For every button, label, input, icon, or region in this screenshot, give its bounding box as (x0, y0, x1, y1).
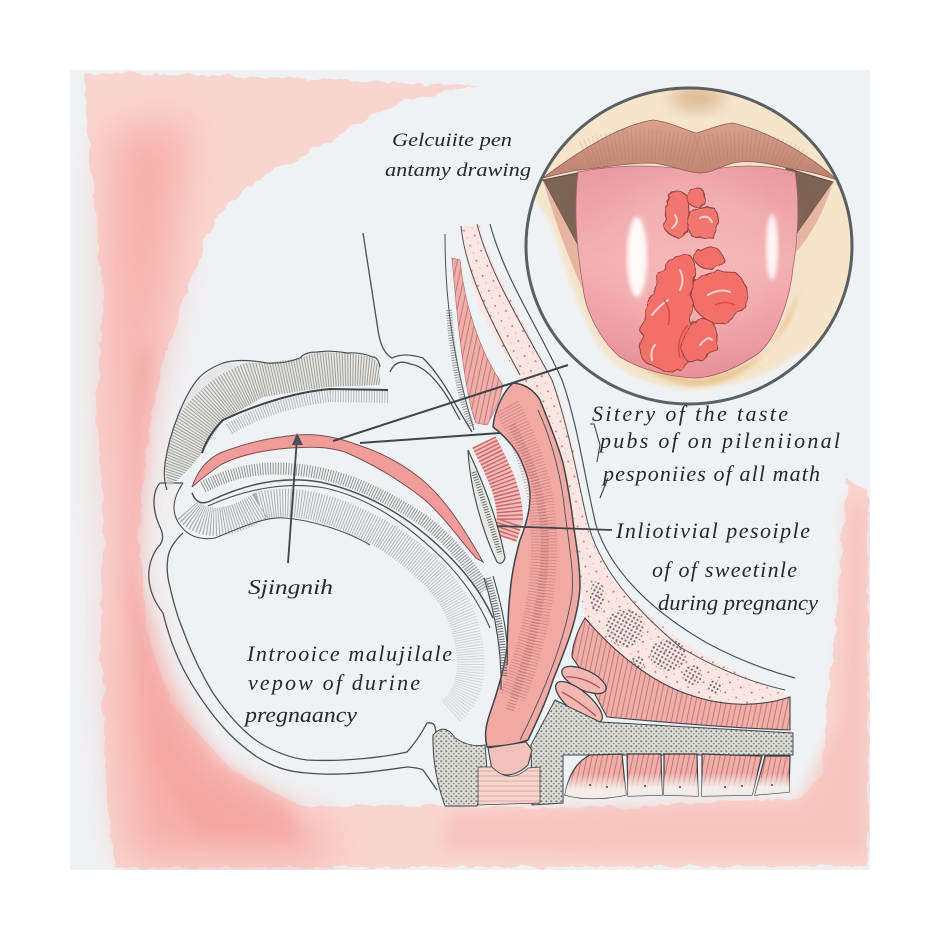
skin around the mouth (520, 80, 860, 390)
wart highlights (651, 215, 730, 360)
watercolor wash: pink border (84, 72, 868, 868)
lower lip edge right (796, 182, 833, 252)
circle outline (526, 88, 852, 404)
lower pink hatched tissue (572, 618, 790, 730)
oral cavity outline curves (149, 233, 472, 790)
label: pregnancy note left: Introoice malujilale (246, 641, 452, 666)
label: pregnancy note right: of of sweetinle (652, 557, 797, 582)
label: Sjingnih: Sjingnih (248, 575, 333, 599)
soft palate pink strip (452, 258, 503, 425)
label: pregnancy note right: during pregnancy (658, 590, 818, 615)
label: taste buds (592, 401, 840, 486)
label: pregnancy note left: pregnaancy (243, 702, 357, 727)
label: pregnancy note left (243, 641, 452, 727)
label: pregnancy note left: vepow of durine (248, 670, 420, 695)
illustration: watercolor anatomy drawing (70, 70, 870, 870)
pointer: Sjingnih label (288, 433, 303, 563)
upper lip (543, 120, 837, 180)
large wart (639, 247, 748, 373)
palate: upper hatched band (164, 351, 388, 490)
bracket lines near right labels (590, 424, 608, 498)
caption: drawing title (385, 130, 531, 181)
caption: drawing title: antamy drawing (385, 160, 531, 181)
magnified circle: tongue close-up (520, 80, 860, 404)
tan halo under tongue (581, 286, 798, 388)
small folded organ (550, 661, 610, 729)
label: taste buds: Sitery of the taste (592, 401, 788, 426)
dark cell clusters (590, 581, 722, 694)
tongue inner glow (626, 166, 752, 334)
label: taste buds: pesponiies of all math (601, 461, 820, 486)
bottom of pharynx cartilage (433, 729, 540, 806)
caption: drawing title: Gelcuiite pen (392, 130, 512, 151)
pointer: epiglottis label (497, 526, 612, 530)
label: pregnancy note right (615, 518, 818, 615)
pointer: pharynx to tongue (360, 433, 500, 443)
lip texture (585, 144, 800, 165)
label: pregnancy note right: Inliotivial pesoiple (615, 518, 810, 543)
paper sheet (70, 70, 870, 870)
stippled spine band (531, 700, 793, 805)
tongue (576, 166, 798, 378)
dark mouth corner left (542, 172, 578, 245)
epiglottis striped sliver (468, 450, 505, 563)
vertebrae blocks (565, 754, 790, 798)
tongue in cross section (192, 435, 483, 562)
pharynx column (486, 383, 580, 747)
right soft-tissue layers with dots (445, 224, 795, 706)
wart red creases (664, 300, 735, 358)
philtrum shading (671, 86, 723, 110)
dark mouth corner right (786, 168, 833, 232)
highlight right (766, 214, 778, 280)
grey hatched side wall (484, 576, 507, 690)
label: taste buds: pubs of on pileniional (598, 428, 840, 453)
small wart (665, 188, 719, 238)
epiglottis pink folds (484, 442, 510, 538)
lower tongue bands (174, 469, 493, 712)
highlight left (627, 217, 647, 297)
pointer: circle to tongue (333, 365, 568, 441)
lower lip edge left (543, 180, 584, 292)
